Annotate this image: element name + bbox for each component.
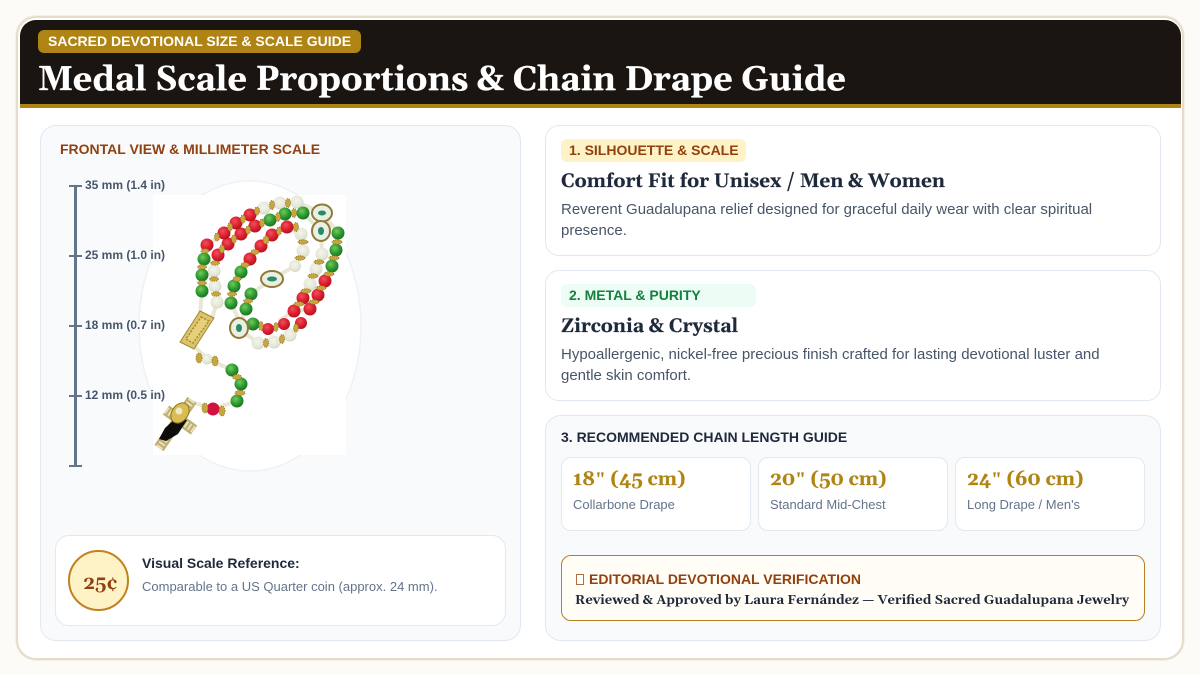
icon: quarter coin: 25¢: [83, 572, 118, 596]
icon: quarter coin: [68, 550, 129, 611]
gold centerpiece: [180, 311, 214, 349]
scale label: 12 mm: 12 mm (0.5 in): [85, 388, 165, 402]
panel: recommended chain length guide: [545, 415, 1161, 641]
chain option: 24 inch: 24" (60 cm): [967, 468, 1083, 492]
card 2 heading: Zirconia & Crystal: [561, 315, 738, 339]
crystal beads: [202, 196, 328, 364]
visual scale description: Comparable to a US Quarter coin (approx. 24 mm).: [142, 579, 438, 594]
chain option: 24 inch: Long Drape / Men's: [967, 497, 1080, 512]
header band: [20, 20, 1181, 108]
card 1: silhouette and scale: [545, 125, 1161, 256]
card 1 text: Reverent Guadalupana relief designed for graceful daily wear with clear spiritual presence.: [561, 201, 1092, 239]
chain option: 20 inch: 20" (50 cm): [770, 468, 887, 492]
tag: metal and purity: [561, 284, 756, 307]
chain option: 18 inch: 18" (45 cm): [573, 468, 685, 492]
scale label: 35 mm: 35 mm (1.4 in): [85, 178, 165, 192]
millimeter scale ruler: [69, 185, 82, 467]
title: Medal Scale Proportions & Chain Drape Guide: [38, 58, 846, 102]
chain guide heading: 3. RECOMMENDED CHAIN LENGTH GUIDE: [561, 429, 847, 445]
card 2 text: Hypoallergenic, nickel-free precious finish crafted for lasting devotional luster and gentle skin comfort.: [561, 346, 1100, 384]
tag: silhouette and scale: [561, 139, 746, 162]
icon: missing-glyph box: [576, 574, 584, 585]
card: visual scale reference: [55, 535, 506, 626]
green beads: [196, 206, 344, 408]
chain option: 18 inch: [561, 457, 751, 531]
tag: silhouette and scale: 1. SILHOUETTE & SCALE: [569, 142, 739, 158]
card 1 heading: Comfort Fit for Unisex / Men & Women: [561, 170, 945, 194]
verification heading: EDITORIAL DEVOTIONAL VERIFICATION: [589, 571, 861, 587]
chain option: 24 inch: [955, 457, 1145, 531]
oval medals: [230, 204, 332, 338]
chain option: 20 inch: Standard Mid-Chest: [770, 497, 886, 512]
panel: frontal view and millimeter scale: [40, 125, 521, 641]
scale label: 18 mm: 18 mm (0.7 in): [85, 318, 165, 332]
verification text: Reviewed & Approved by Laura Fernández — Verified Sacred Guadalupana Jewelry: [575, 593, 1129, 609]
callout: editorial verification: [561, 555, 1145, 621]
red beads: [200, 208, 332, 416]
tag: metal and purity: 2. METAL & PURITY: [569, 287, 701, 303]
badge: guide category: SACRED DEVOTIONAL SIZE & SCALE GUIDE: [48, 33, 351, 49]
crucifix: [159, 399, 194, 448]
panel heading: frontal view: FRONTAL VIEW & MILLIMETER SCALE: [60, 141, 320, 157]
visual scale heading: Visual Scale Reference:: [142, 555, 300, 571]
gold spacers: [196, 198, 342, 416]
rosary illustration on oval backdrop: [138, 180, 362, 472]
badge: guide category: [38, 30, 361, 53]
cords: [192, 202, 338, 409]
chain option: 20 inch: [758, 457, 948, 531]
scale label: 25 mm: 25 mm (1.0 in): [85, 248, 165, 262]
chain option: 18 inch: Collarbone Drape: [573, 497, 675, 512]
card 2: metal and purity: [545, 270, 1161, 401]
